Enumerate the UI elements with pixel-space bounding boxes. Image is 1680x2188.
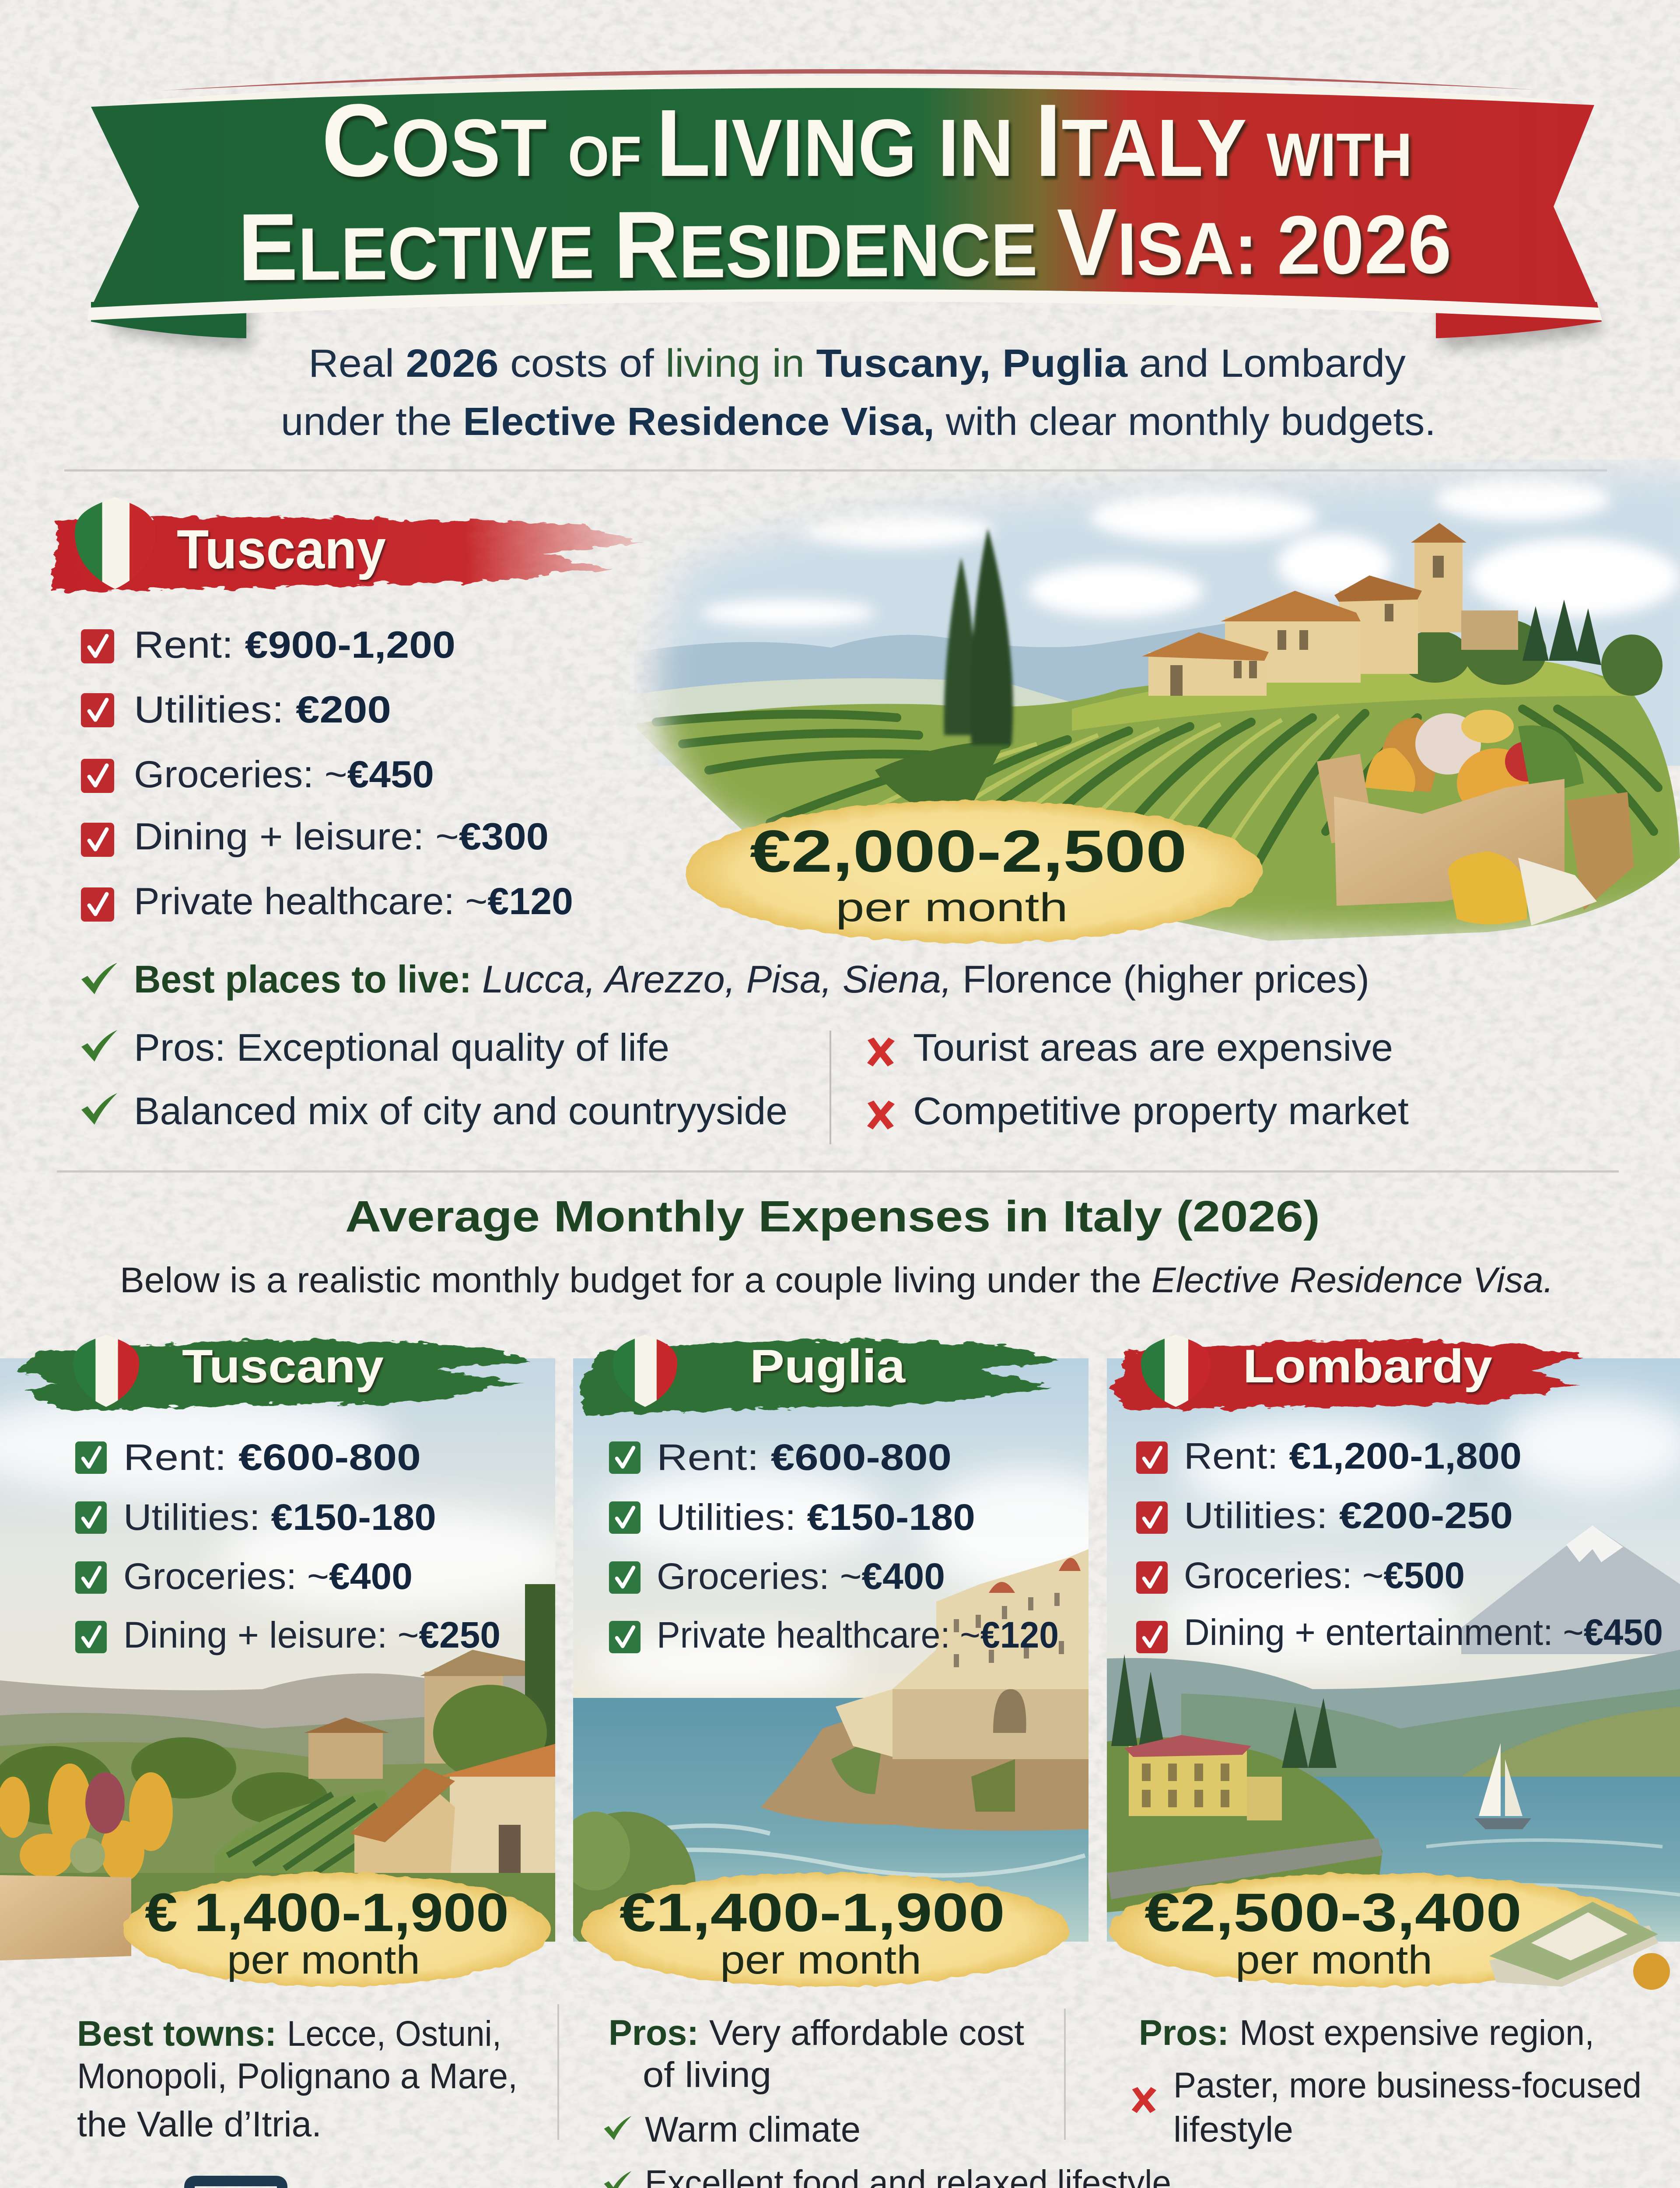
notes: Puglia column: Pros:: [609, 2013, 699, 2053]
price badge: per month: [720, 1938, 921, 1982]
price badge: [123, 1873, 550, 1987]
groceries bag: [1317, 710, 1634, 926]
notes: Tuscany column: Monopoli, Polignano a Mare,: [77, 2056, 518, 2096]
cost checklist: Rent: €600-800: [657, 1437, 952, 1478]
pros list: Pros: Exceptional quality of life: [134, 1026, 669, 1069]
notes: Lombardy column: lifestyle: [1173, 2110, 1293, 2149]
notes: Puglia column: Warm climate: [645, 2110, 861, 2149]
cost checklist: Private healthcare: ~€120: [134, 880, 573, 922]
banner: Tuscany green brush: [16, 1335, 530, 1411]
cost checklist: [75, 1437, 500, 1655]
icon: Italian flag shield: [75, 497, 155, 589]
banner: Tuscany red brush: [53, 497, 643, 592]
notes: Tuscany column: [77, 2014, 518, 2144]
region name: Tuscany: [182, 1339, 384, 1392]
icon: flag shield: [613, 1335, 677, 1407]
cost checklist: Groceries: ~€500: [1184, 1555, 1465, 1596]
cost checklist: Rent: €900-1,200: [134, 624, 455, 666]
illustration: Puglia coast: [556, 1358, 1133, 1960]
title line 1: COST OF LIVING IN ITALY WITH: [322, 83, 1412, 198]
price badge: €2,500-3,400: [1144, 1883, 1522, 1943]
price badge: [686, 800, 1262, 943]
cost checklist: Groceries: ~€450: [134, 754, 434, 796]
title banner: [88, 69, 1606, 349]
icon: flag shield: [73, 1335, 139, 1407]
cost checklist: Utilities: €200: [134, 689, 391, 731]
price badge: [582, 1873, 1069, 1987]
illustration: Tuscan vineyard landscape: [569, 459, 1680, 941]
cost checklist: [81, 624, 573, 922]
cost checklist: Utilities: €150-180: [123, 1497, 436, 1538]
best places line: [81, 957, 1369, 1001]
price badge: € 1,400-1,900: [145, 1883, 509, 1943]
region name: Puglia: [750, 1339, 906, 1392]
banner: Lombardy red brush: [1109, 1335, 1586, 1409]
notes: Puglia column: of living: [643, 2055, 771, 2095]
cons list: Tourist areas are expensive: [913, 1026, 1393, 1069]
cost checklist: [1136, 1435, 1663, 1653]
pros list: [81, 1026, 788, 1133]
cost checklist: [609, 1437, 1059, 1655]
cost checklist: Groceries: ~€400: [123, 1556, 413, 1597]
region name: Lombardy: [1243, 1339, 1492, 1392]
illustration: Lombardy lake: [1107, 1358, 1680, 1943]
cost checklist: Utilities: €200-250: [1184, 1495, 1513, 1536]
cost checklist: Dining + leisure: ~€250: [123, 1614, 500, 1655]
icon: banknotes and coin: [1489, 1902, 1670, 1990]
notes: Tuscany column: Lecce, Ostuni,: [287, 2014, 501, 2054]
groceries: [0, 1764, 173, 1960]
panel: Tuscany budget: [0, 1335, 569, 1987]
title line 2: ELECTIVE RESIDENCE VISA: 2026: [238, 187, 1452, 301]
cost checklist: Utilities: €150-180: [657, 1497, 975, 1538]
notes: Tuscany column: Best towns:: [77, 2014, 276, 2054]
notes: Puglia column: [604, 2013, 1171, 2188]
subtitle: Real 2026 costs of living in Tuscany, Puglia and Lombardy: [308, 342, 1406, 386]
cons list: Competitive property market: [913, 1089, 1409, 1133]
handle: [189, 2181, 282, 2188]
best places line: Lucca, Arezzo, Pisa, Siena, Florence (higher prices): [482, 957, 1369, 1001]
price badge: [1109, 1873, 1639, 1987]
region name: Tuscany: [177, 519, 386, 580]
cypress trees: [944, 528, 1013, 745]
icon: flag shield: [1141, 1335, 1211, 1407]
section intro: Below is a realistic monthly budget for a couple living under the Elective Residence Visa.: [120, 1260, 1554, 1300]
price badge: per month: [1236, 1938, 1432, 1982]
cost checklist: Rent: €1,200-1,800: [1184, 1435, 1522, 1476]
price badge: per month: [227, 1938, 420, 1982]
village on the hill: [1142, 523, 1662, 696]
notes: Lombardy column: Most expensive region,: [1239, 2013, 1594, 2053]
notes: Lombardy column: [1132, 2013, 1642, 2149]
banner: Puglia green brush: [578, 1335, 1061, 1416]
price badge: €1,400-1,900: [620, 1883, 1005, 1943]
price badge: per month: [836, 885, 1068, 930]
panel: Tuscany overview: [53, 459, 1680, 1144]
cost checklist: Dining + entertainment: ~€450: [1184, 1612, 1663, 1653]
cons list: [867, 1026, 1409, 1133]
subtitle: [281, 342, 1436, 444]
notes: Puglia column: Very affordable cost: [709, 2013, 1024, 2053]
illustration: Tuscan countryside: [0, 1358, 569, 1943]
notes: Lombardy column: Pros:: [1139, 2013, 1229, 2053]
cost checklist: Rent: €600-800: [123, 1437, 421, 1478]
cost checklist: Dining + leisure: ~ €300: [134, 816, 549, 858]
cost checklist: Private healthcare: ~€120: [657, 1614, 1059, 1655]
notes: Tuscany column: the Valle d’Itria.: [77, 2104, 322, 2144]
cost checklist: Groceries: ~€400: [657, 1556, 945, 1597]
best places line: Best places to live:: [134, 957, 472, 1001]
subtitle: under the Elective Residence Visa, with clear monthly budgets.: [281, 400, 1436, 444]
panel: Lombardy budget: [1107, 1335, 1680, 1990]
notes: Lombardy column: Paster, more business-focused: [1173, 2065, 1642, 2105]
section heading: Average Monthly Expenses in Italy (2026): [345, 1192, 1320, 1241]
price badge: €2,000-2,500: [750, 818, 1187, 884]
illustration: medical bag, clipboard and money: [61, 2181, 491, 2188]
pros list: Balanced mix of city and countryyside: [134, 1089, 788, 1133]
panel: Puglia budget: [556, 1335, 1133, 1987]
